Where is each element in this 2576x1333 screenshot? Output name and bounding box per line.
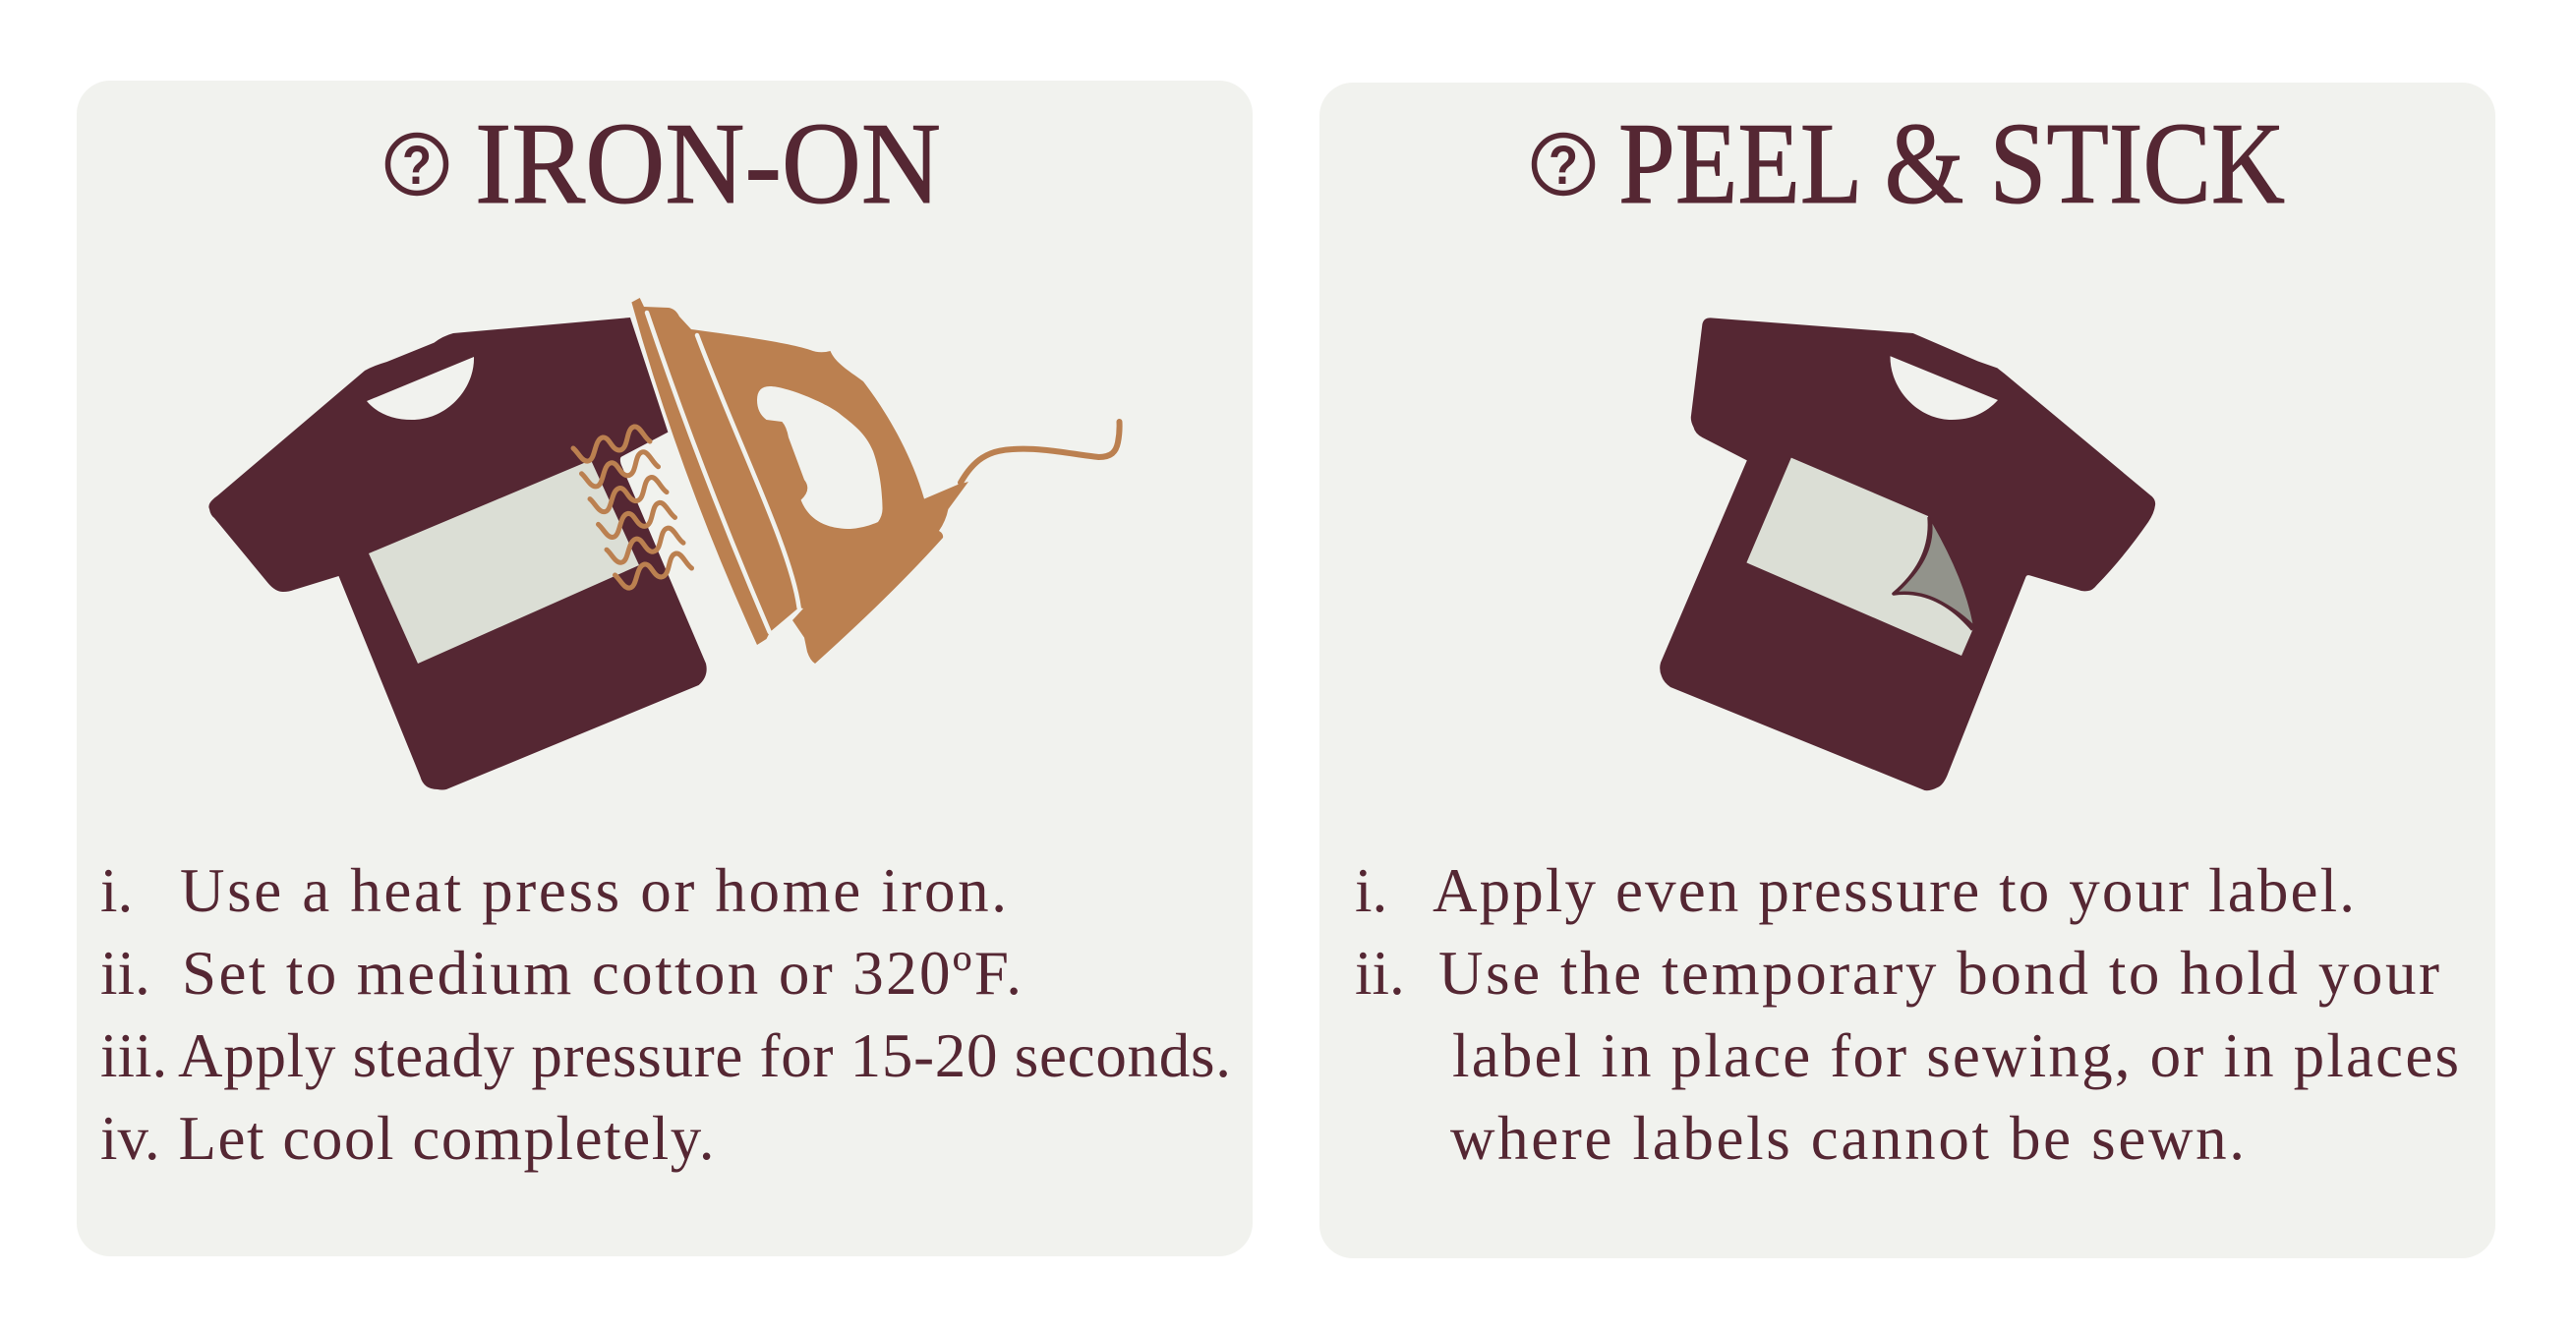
steps: iron-on: iii. [100,1021,167,1090]
icon: question mark: ? [402,134,432,196]
icon: question mark [1534,134,1593,196]
steps: peel and stick [1355,856,2459,1173]
steps: iron-on: Use a heat press or home iron. [180,856,1007,925]
steps: iron-on: i. [100,856,133,925]
panel: iron-on [77,81,1253,1256]
heading: peel and stick: PEEL & STICK [1618,98,2285,228]
icon: question mark: ? [1549,134,1578,196]
steps: iron-on: ii. [100,939,150,1008]
steps: iron-on: Set to medium cotton or 320ºF. [182,939,1022,1008]
steps: peel and stick: where labels cannot be sewn. [1450,1104,2245,1173]
illustration: t-shirt with iron [208,298,1120,790]
icon: iron [631,298,1120,664]
steps: peel and stick: Use the temporary bond to hold your [1438,939,2439,1008]
t-shirt [1660,318,2155,790]
steps: peel and stick: Apply even pressure to your label. [1433,856,2355,925]
panel: peel and stick [1319,83,2495,1258]
shirt neck opening [1890,356,1998,420]
peel outline [1894,517,1972,630]
t-shirt [208,318,707,790]
heat waves [573,427,692,588]
steps: iron-on [100,856,1231,1173]
peeled label corner [1898,524,1972,623]
heading: iron-on: IRON-ON [475,98,941,228]
label on shirt [369,460,639,664]
steps: iron-on: Let cool completely. [179,1104,714,1173]
steps: iron-on: iv. [100,1104,160,1173]
shirt neck opening [367,357,474,420]
icon: question mark [387,134,446,196]
steps: iron-on: Apply steady pressure for 15-20 seconds. [178,1021,1231,1090]
steps: peel and stick: label in place for sewing, or in places [1452,1021,2459,1090]
illustration: t-shirt with peeling label [1660,318,2155,790]
steps: peel and stick: ii. [1355,939,1405,1008]
steps: peel and stick: i. [1355,856,1387,925]
label on shirt [1746,458,1972,656]
